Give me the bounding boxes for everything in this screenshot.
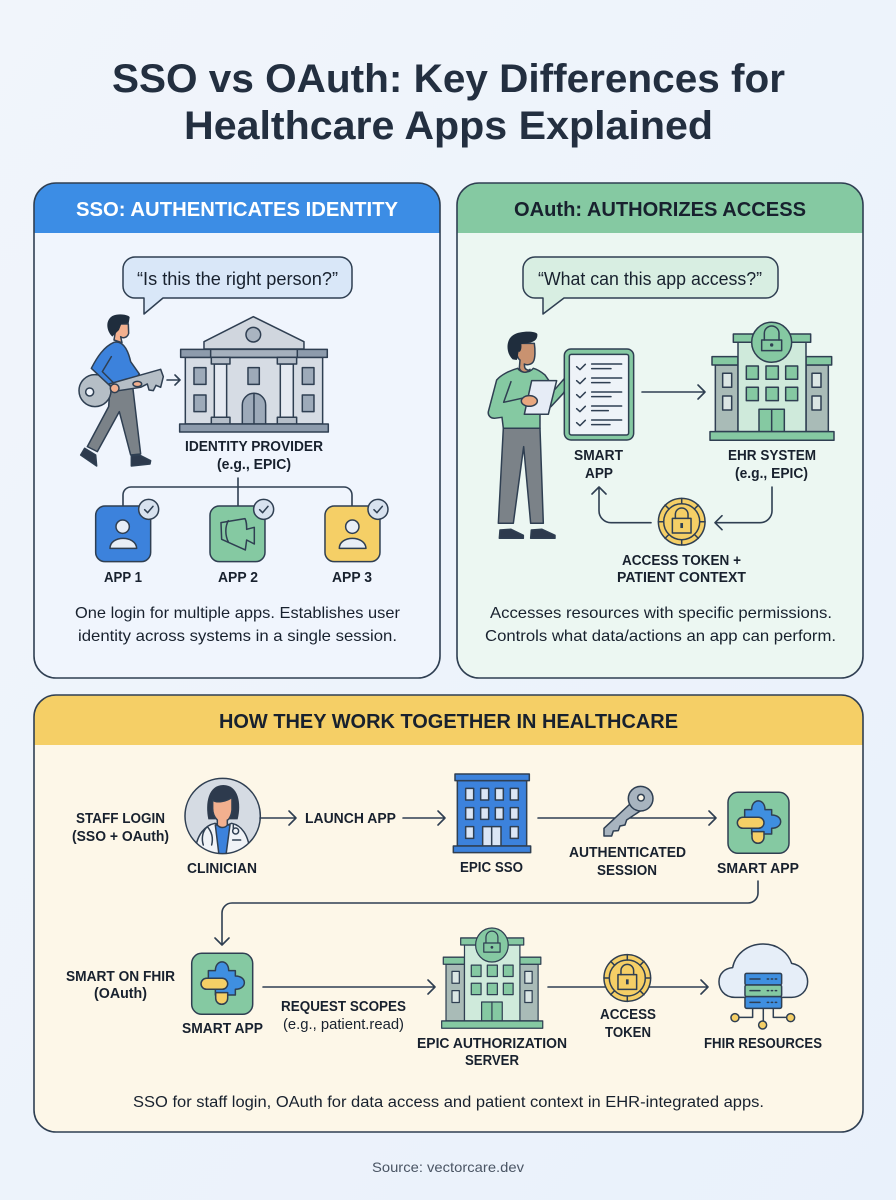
panel: OAuth authorizes access — [457, 183, 863, 678]
label: SMART on FHIR — [66, 969, 175, 1002]
label: EHR system: (e.g., EPIC) — [735, 466, 808, 482]
speech bubble: app access — [523, 257, 778, 314]
icon: SMART app — [728, 792, 789, 853]
speech bubble: right person: “Is this the right person?” — [137, 269, 338, 289]
panel: how they work together — [34, 695, 863, 1132]
text: OAuth description: Accesses resources with specific permissions. — [490, 605, 832, 622]
icon: person carrying key — [79, 314, 163, 466]
text: SSO description: identity across systems in a single session. — [78, 628, 397, 645]
label: SMART app: SMART — [574, 448, 623, 464]
label: access token and patient context — [617, 553, 746, 586]
label: authenticated session — [569, 845, 686, 879]
text: OAuth description: Controls what data/actions an app can perform. — [485, 628, 836, 645]
arrow: token to SMART app — [592, 487, 651, 523]
icon: SMART app — [192, 953, 253, 1014]
label: SMART app: APP — [585, 466, 613, 482]
icon: app 3 — [325, 499, 388, 562]
text: summary: SSO for staff login, OAuth for data access and patient context in EHR-integrated apps. — [133, 1094, 764, 1111]
icon: access token — [658, 498, 705, 545]
arrow: person to identity provider — [167, 375, 180, 385]
label: app names: APP 2 — [218, 570, 258, 586]
icon: FHIR cloud server — [719, 944, 808, 1029]
connector: provider to apps — [123, 478, 352, 506]
title: Healthcare Apps Explained — [184, 104, 713, 148]
source: Source: vectorcare.dev — [372, 1159, 524, 1175]
label: access token: TOKEN — [605, 1025, 651, 1041]
speech bubble: app access: “What can this app access?” — [538, 269, 762, 289]
label: access token: ACCESS — [600, 1007, 656, 1023]
text: OAuth description — [485, 605, 836, 645]
panel: SSO authenticates identity — [34, 183, 440, 678]
label: identity provider: IDENTITY PROVIDER — [185, 439, 323, 455]
icon: app 2 — [210, 499, 274, 562]
heading: OAuth: OAuth: AUTHORIZES ACCESS — [514, 199, 806, 221]
arrow: server to FHIR resources — [548, 980, 708, 994]
label: Epic authorization server: SERVER — [465, 1053, 519, 1069]
arrow: EHR to token — [715, 487, 772, 530]
icon: Epic SSO building — [453, 774, 531, 853]
label: app names — [104, 570, 372, 586]
label: request scopes — [281, 999, 406, 1033]
title — [112, 57, 785, 148]
label: SMART app: SMART APP — [717, 861, 799, 877]
label: clinician: CLINICIAN — [187, 861, 257, 877]
label: authenticated session: AUTHENTICATED — [569, 845, 686, 861]
label: app names: APP 3 — [332, 570, 372, 586]
icon: EHR hospital — [710, 322, 834, 440]
label: identity provider: (e.g., EPIC) — [217, 457, 291, 473]
arrow: SMART app to authorization server — [263, 980, 435, 994]
label: access token — [600, 1007, 656, 1041]
label: EHR system: EHR SYSTEM — [728, 448, 816, 464]
label: authenticated session: SESSION — [597, 863, 657, 879]
label: access token and patient context: PATIENT CONTEXT — [617, 570, 746, 586]
label: SMART on FHIR: SMART ON FHIR — [66, 969, 175, 985]
label: Epic authorization server: EPIC AUTHORIZATION — [417, 1036, 567, 1052]
label: staff login: (SSO + OAuth) — [72, 829, 169, 845]
label: launch app: LAUNCH APP — [305, 811, 396, 827]
text: SSO description: One login for multiple apps. Establishes user — [75, 605, 401, 622]
icon: clinician — [185, 778, 260, 857]
speech bubble: right person — [123, 257, 352, 314]
label: SMART app — [574, 448, 623, 482]
label: app names: APP 1 — [104, 570, 142, 586]
label: identity provider — [185, 439, 323, 473]
label: Epic authorization server — [417, 1036, 567, 1069]
icon: Epic authorization server — [442, 928, 543, 1028]
arrow: Epic SSO to SMART app — [538, 811, 716, 825]
icon: identity provider building — [180, 317, 328, 432]
icon: person with tablet — [488, 332, 573, 538]
label: SMART app: SMART APP — [182, 1021, 263, 1037]
icon: SMART app checklist — [564, 349, 634, 440]
icon: access token — [604, 955, 651, 1001]
label: FHIR resources: FHIR RESOURCES — [704, 1036, 822, 1052]
label: staff login — [72, 811, 169, 845]
arrow: clinician to launch — [260, 811, 296, 825]
label: access token and patient context: ACCESS TOKEN + — [622, 553, 741, 569]
label: SMART on FHIR: (OAuth) — [94, 986, 147, 1002]
label: request scopes: (e.g., patient.read) — [283, 1017, 404, 1033]
arrow: launch to Epic SSO — [403, 811, 445, 825]
label: Epic SSO: EPIC SSO — [460, 860, 523, 876]
arrow: row 1 to row 2 — [215, 881, 758, 945]
label: request scopes: REQUEST SCOPES — [281, 999, 406, 1015]
heading: SSO: SSO: AUTHENTICATES IDENTITY — [76, 199, 399, 221]
label: EHR system — [728, 448, 816, 482]
icon: app 1 — [96, 499, 159, 562]
icon: session key — [604, 786, 653, 836]
heading: together: HOW THEY WORK TOGETHER IN HEALTHCARE — [219, 711, 678, 733]
label: staff login: STAFF LOGIN — [76, 811, 165, 827]
arrow: SMART app to EHR — [642, 385, 705, 399]
title: SSO vs OAuth: Key Differences for — [112, 57, 785, 101]
text: SSO description — [75, 605, 401, 645]
